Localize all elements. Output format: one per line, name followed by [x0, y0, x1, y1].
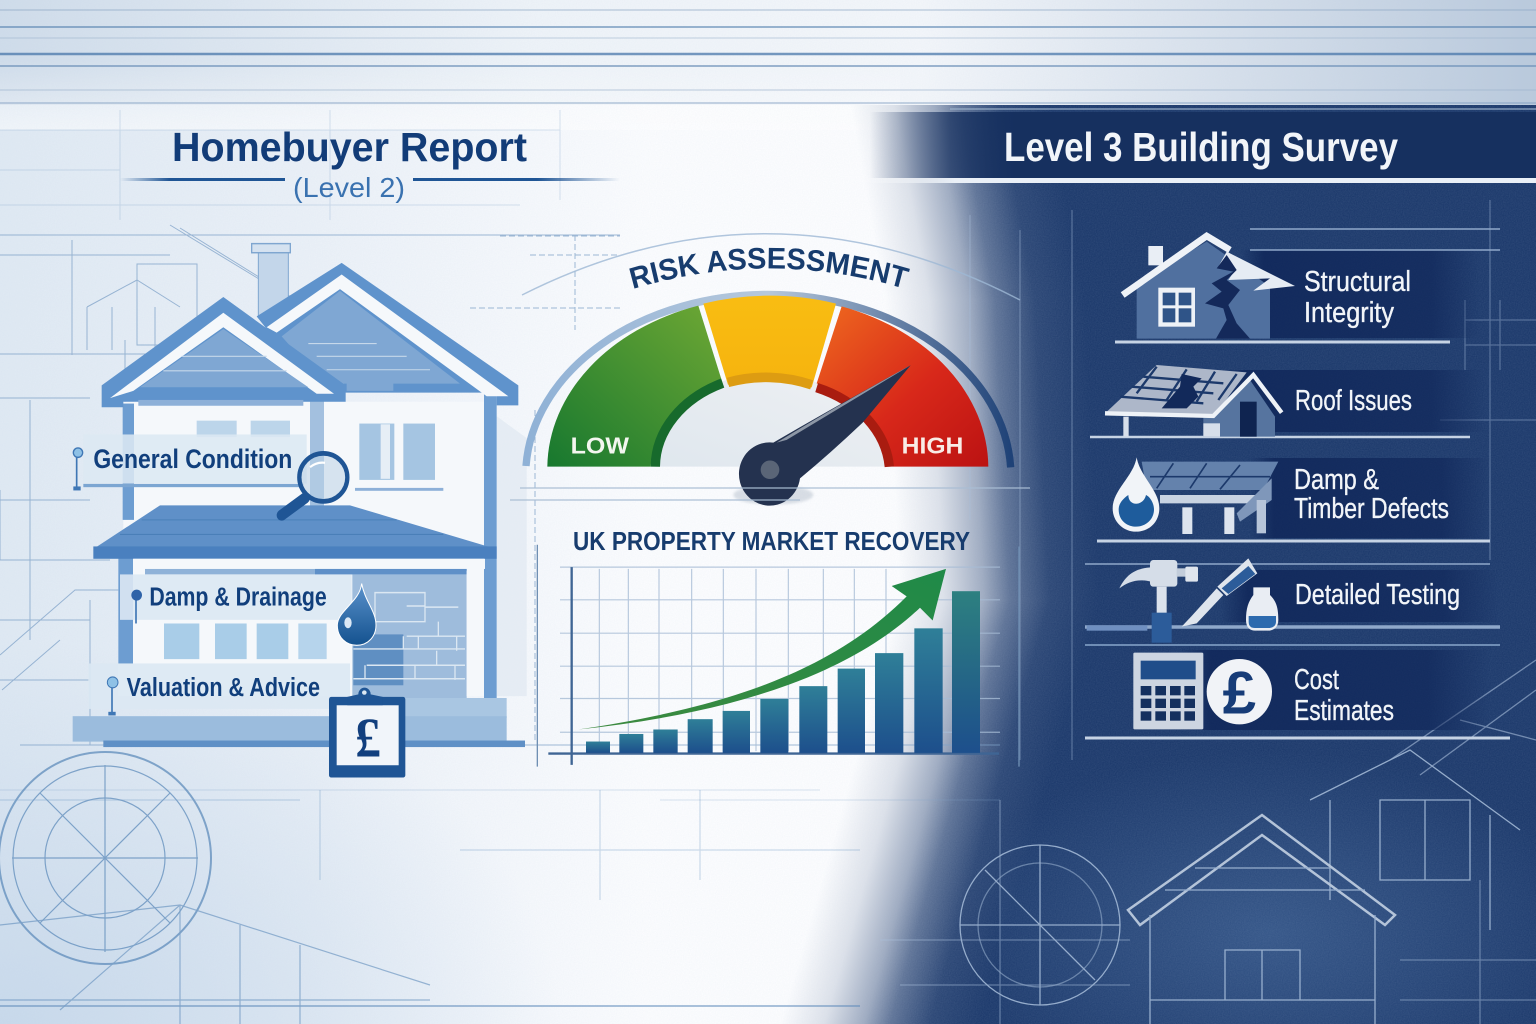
wall pillars [118, 391, 497, 700]
icon: water drop [337, 584, 376, 645]
label: General Condition: General Condition [93, 445, 292, 474]
icon: roof issues [1105, 365, 1282, 437]
green segment [547, 306, 723, 467]
blueprint: bottom-right houses and circle [880, 200, 1536, 1024]
heading: Homebuyer Report: Homebuyer Report [172, 124, 527, 170]
risk gauge [522, 248, 1014, 506]
yellow segment [703, 296, 836, 388]
chart heading: UK PROPERTY MARKET RECOVERY [573, 526, 970, 556]
text: Structural Integrity [1304, 266, 1411, 329]
icon: testing tools [1087, 558, 1278, 643]
ground floor [133, 559, 485, 659]
right column divider lines [1085, 229, 1510, 738]
text: Structural Integrity: Structural [1304, 266, 1411, 298]
gauge outer ring [526, 295, 1011, 467]
market recovery chart [537, 545, 1019, 767]
heading: Level 3 Building Survey: Level 3 Building Survey [1004, 124, 1398, 170]
gauge face [651, 374, 885, 467]
house illustration [73, 244, 527, 778]
label: Valuation & Advice [88, 663, 350, 715]
heading: Homebuyer Report [120, 124, 620, 203]
HIGH label: HIGH [902, 433, 963, 459]
left roof gable [102, 297, 346, 407]
left blueprint sketch lines [0, 110, 1000, 800]
inner rim shading [655, 377, 889, 467]
heading underline [120, 178, 620, 181]
upper windows [197, 421, 443, 491]
gauge arc backdrop line [522, 234, 1020, 300]
icon: clipboard with pound [329, 688, 405, 778]
chart grid [560, 567, 1000, 751]
label: General Condition [73, 434, 307, 490]
blueprint: bottom-left compass circle and roof [0, 752, 860, 1024]
icon: magnifying glass [282, 453, 347, 515]
text: Cost Estimates [1294, 664, 1394, 727]
text: Structural Integrity: Integrity [1304, 297, 1394, 329]
brick wall [352, 571, 479, 698]
LOW label: LOW [571, 433, 630, 459]
heading: Homebuyer Report: (Level 2) [293, 172, 405, 203]
text: Cost Estimates: Cost [1294, 664, 1339, 696]
icon: calculator and pound: £ [1223, 659, 1256, 726]
red segment [817, 306, 988, 467]
shade beside house [497, 416, 527, 696]
text: Damp & Timber Defects: Damp & [1294, 464, 1379, 496]
text: Roof Issues: Roof Issues [1295, 385, 1412, 417]
gauge needle [733, 365, 911, 506]
chart bars [586, 591, 980, 753]
text: Damp & Timber Defects [1294, 464, 1449, 525]
chimney [252, 244, 290, 317]
house walls [118, 402, 497, 696]
heading: Level 3 Building Survey [860, 108, 1536, 183]
chart frame [537, 545, 1019, 767]
steps [73, 698, 525, 747]
label: Damp & Drainage [120, 574, 352, 623]
text: Cost Estimates: Estimates [1294, 695, 1394, 727]
divider lines under gauge [510, 488, 1030, 500]
icon: structural integrity [1123, 236, 1295, 339]
growth arrow [578, 569, 946, 729]
porch roof [93, 505, 497, 559]
label: Damp & Drainage: Damp & Drainage [149, 582, 327, 612]
right roof gable [257, 263, 518, 405]
top blueprint stripes [0, 10, 1536, 103]
text: Damp & Timber Defects: Timber Defects [1294, 493, 1449, 525]
right column row bands [1180, 250, 1500, 730]
chart axes [548, 567, 999, 765]
icon: calculator and pound [1133, 653, 1272, 729]
icon: clipboard with pound: £ [355, 706, 381, 769]
text: Detailed Testing: Detailed Testing [1295, 579, 1460, 611]
icon: damp and timber [1113, 457, 1278, 534]
gauge title: RISK ASSESSMENT [629, 248, 910, 288]
label: Valuation & Advice: Valuation & Advice [127, 673, 320, 702]
